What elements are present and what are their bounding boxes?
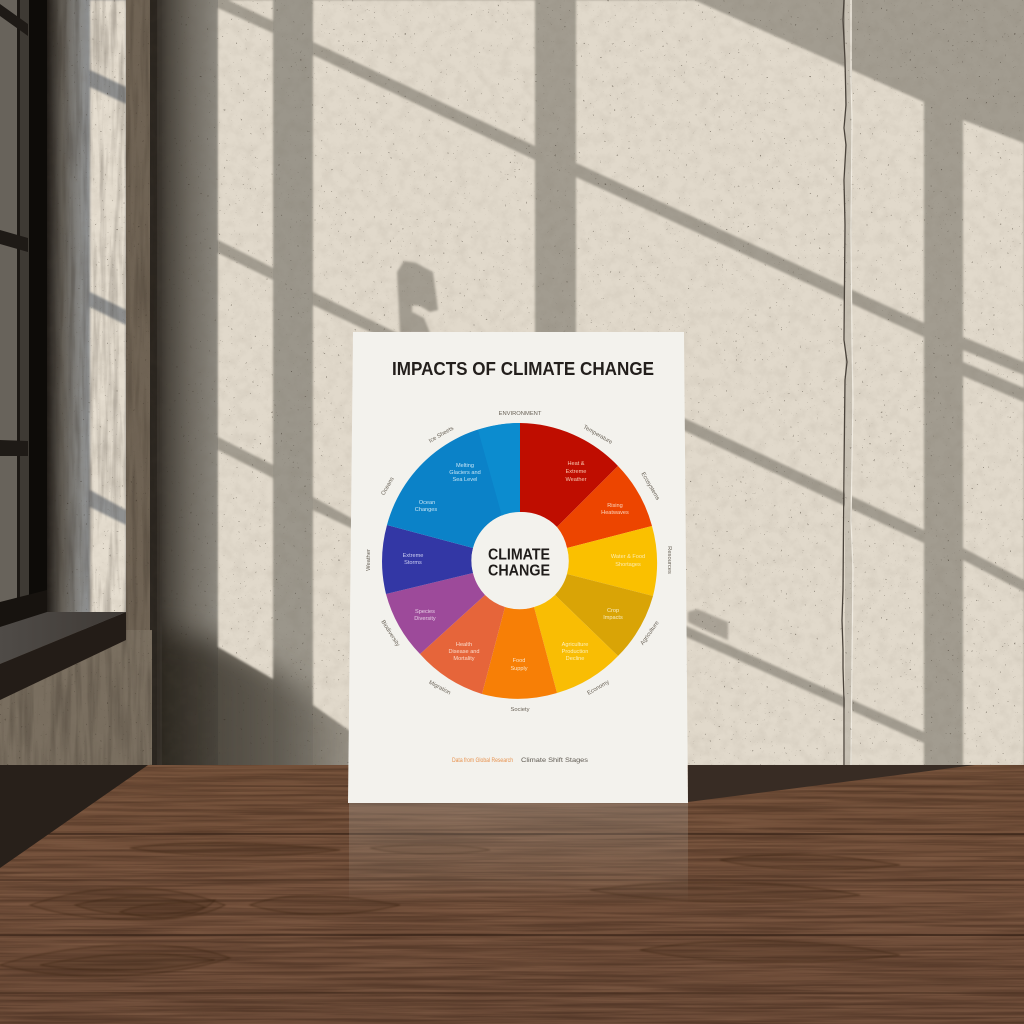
pillar xyxy=(126,0,162,766)
segment labels: Supply xyxy=(510,666,528,672)
concrete mottling and specks xyxy=(0,0,1024,766)
center label: CLIMATE xyxy=(488,546,550,564)
outer rim labels: Agriculture xyxy=(640,620,661,647)
outer rim labels: ENVIRONMENT xyxy=(499,411,542,417)
wood grain swirls xyxy=(0,843,900,976)
segment labels: Agriculture xyxy=(562,642,588,648)
segment: light blue wedge xyxy=(478,423,520,516)
outer rim labels: Ice Sheets xyxy=(428,426,455,445)
center label xyxy=(488,546,550,580)
center label: CHANGE xyxy=(488,562,550,580)
segment: blue xyxy=(387,423,520,548)
segment labels: Diversity xyxy=(414,616,436,622)
wall below sill xyxy=(0,630,152,766)
segment labels: Melting xyxy=(456,463,474,469)
outer rim labels: Weather xyxy=(366,549,372,571)
segment: orange xyxy=(482,607,557,699)
segment labels: Heatwaves xyxy=(601,510,629,516)
outer rim labels: Society xyxy=(510,707,530,713)
segment: red xyxy=(520,423,618,527)
segment labels: Sea Level xyxy=(453,477,477,483)
segment: coral xyxy=(420,595,505,694)
footer xyxy=(452,757,588,764)
outer rim labels xyxy=(366,411,672,713)
segment labels: Mortality xyxy=(453,656,475,662)
segment labels xyxy=(403,461,645,672)
window frame and glass xyxy=(0,0,47,628)
segment labels: Heat & xyxy=(567,461,585,467)
outer rim labels: Economy xyxy=(587,679,611,697)
shadow blob right of poster xyxy=(688,609,728,640)
sunlight window panes cast on wall xyxy=(218,0,1024,766)
corner shade at left of wall xyxy=(152,0,218,766)
segment labels: Weather xyxy=(565,477,587,483)
segment labels: Extreme xyxy=(403,553,423,559)
band shadow between first panes xyxy=(273,0,313,766)
outer rim labels: Temperature xyxy=(582,424,613,446)
segment labels: Species xyxy=(415,609,435,615)
poster reflection on floor xyxy=(349,803,688,905)
right floor shadow xyxy=(688,765,975,802)
segment labels: Impacts xyxy=(603,615,623,621)
segment: orange-red xyxy=(557,466,652,548)
left floor shadow xyxy=(0,765,148,868)
footer: Data from Global Research xyxy=(452,757,513,764)
segment: ochre xyxy=(555,574,653,656)
segment labels: Ocean xyxy=(419,500,435,506)
footer: Climate Shift Stages xyxy=(521,757,588,764)
poster xyxy=(348,332,688,803)
segment labels: Rising xyxy=(607,503,623,509)
outer rim labels: Oceans xyxy=(381,476,396,497)
segment labels: Storms xyxy=(404,560,422,566)
segment: indigo xyxy=(382,525,473,594)
segment labels: Production xyxy=(562,649,588,655)
segment: golden yellow xyxy=(534,595,618,693)
plank seams xyxy=(0,786,1024,993)
window sill xyxy=(0,612,126,700)
segment labels: Crop xyxy=(607,608,619,614)
segment labels: Water & Food xyxy=(611,554,645,560)
segment labels: Food xyxy=(513,658,525,664)
segment labels: Health xyxy=(456,642,472,648)
title: IMPACTS OF CLIMATE CHANGE xyxy=(392,358,654,379)
segment labels: Shortages xyxy=(615,562,641,568)
segment labels: Decline xyxy=(566,656,584,662)
center circle xyxy=(472,512,568,609)
outer rim labels: Migration xyxy=(428,680,451,696)
segment labels: Disease and xyxy=(448,649,480,655)
donut chart: climate change impacts xyxy=(366,411,672,713)
outer rim labels: Ecosystems xyxy=(639,471,660,502)
segment: yellow xyxy=(567,526,657,596)
wall in shadow xyxy=(152,0,1024,766)
wall crack and seam xyxy=(842,0,853,766)
lower shade on wall xyxy=(130,625,360,800)
outer rim labels: Resources xyxy=(666,546,672,574)
outer rim labels: Biodiversity xyxy=(379,619,400,648)
wooden floor xyxy=(0,765,1024,1024)
shadow silhouette above poster xyxy=(397,261,438,333)
window reveal wall xyxy=(47,0,126,640)
segment labels: Changes xyxy=(415,507,437,513)
segment labels: Glaciers and xyxy=(449,470,481,476)
segment: purple xyxy=(386,573,485,654)
segment labels: Extreme xyxy=(566,469,586,475)
